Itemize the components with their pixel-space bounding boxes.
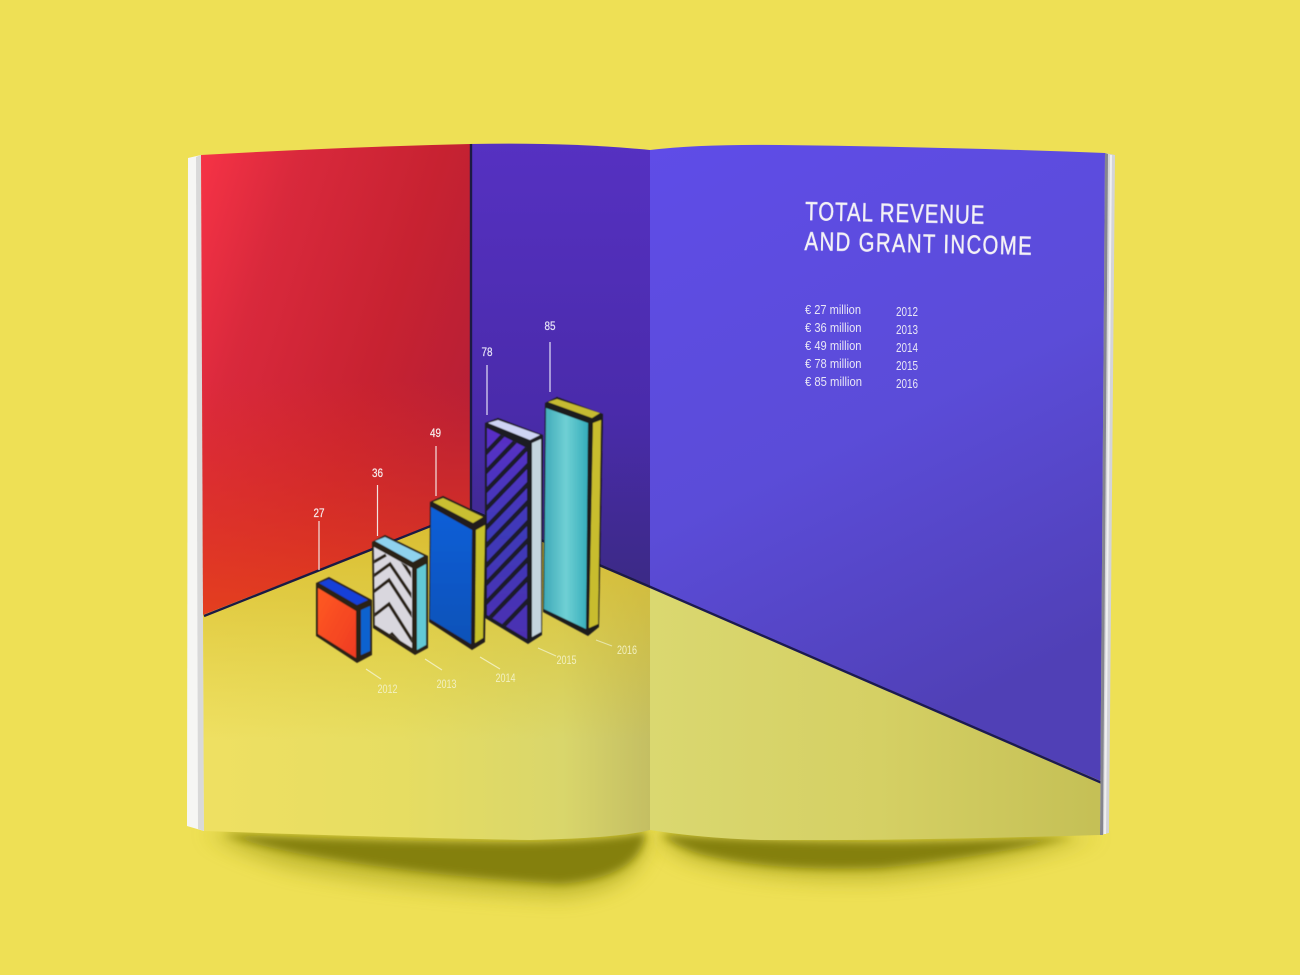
bar 2015 (484, 407, 543, 644)
year 2016: 2016 (617, 643, 637, 657)
row 2013 (805, 320, 918, 337)
label 36: 36 (372, 468, 383, 480)
panel: left page (195, 135, 655, 845)
row 2016: € 85 million (805, 374, 862, 389)
year labels and leader lines (366, 640, 637, 696)
purple wall right page (645, 135, 1110, 785)
row 2012 (805, 302, 918, 319)
year 2014 (480, 657, 516, 685)
title: AND GRANT INCOME (804, 227, 1032, 260)
row 2015: 2015 (896, 358, 918, 373)
page block edge: right (1100, 153, 1115, 835)
label 49 (430, 428, 441, 496)
label 49: 49 (430, 428, 441, 440)
row 2014: 2014 (896, 340, 918, 355)
wall and floor join line (648, 586, 1102, 783)
year 2012 (366, 669, 398, 696)
year 2013 (425, 659, 457, 691)
bar 2014 (429, 496, 487, 650)
year 2012: 2012 (378, 682, 398, 696)
year 2014: 2014 (496, 671, 516, 685)
row 2013: 2013 (896, 322, 918, 337)
row 2014: € 49 million (805, 338, 862, 353)
yellow floor right page (645, 585, 1110, 845)
year 2016 (596, 640, 637, 657)
bar 2012 (316, 577, 372, 663)
label 78 (482, 347, 492, 415)
bar 2013 (372, 535, 428, 655)
title (804, 197, 1033, 260)
panel: right page (645, 135, 1110, 845)
row 2016 (805, 374, 918, 391)
year 2015 (538, 648, 577, 667)
row 2012: 2012 (896, 304, 918, 319)
bar 2016 (543, 397, 603, 636)
wall and floor join lines (204, 140, 655, 616)
label 85 (544, 321, 556, 392)
label 36 (372, 468, 383, 536)
row 2015 (805, 356, 918, 373)
purple wall left page (471, 135, 655, 590)
year 2013: 2013 (436, 677, 457, 691)
bar chart (316, 397, 603, 663)
row 2012: € 27 million (805, 302, 861, 317)
value labels and leader lines (314, 321, 556, 570)
yellow floor left page (195, 510, 655, 845)
book shadow (205, 832, 1100, 897)
row 2013: € 36 million (805, 320, 862, 335)
label 27 (314, 508, 324, 570)
label 85: 85 (544, 321, 556, 333)
page block edge: left (187, 155, 204, 831)
label 78: 78 (482, 347, 492, 359)
row 2016: 2016 (896, 376, 918, 391)
year 2015: 2015 (556, 653, 577, 667)
label 27: 27 (314, 508, 324, 520)
title: TOTAL REVENUE (805, 197, 985, 229)
revenue table (805, 302, 918, 391)
row 2014 (805, 338, 918, 355)
row 2015: € 78 million (805, 356, 862, 371)
red wall (195, 140, 471, 618)
